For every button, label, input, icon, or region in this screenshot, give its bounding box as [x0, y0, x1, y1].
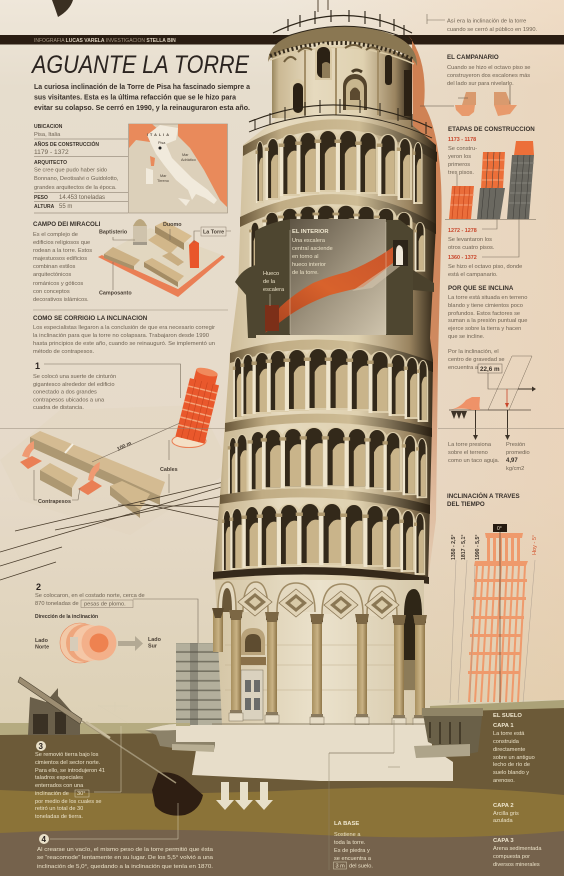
step 4: settling: [37, 803, 214, 870]
panel: el suelo: compuesta por: [493, 854, 530, 860]
credits bar: [0, 35, 564, 44]
panel: etapas de construccion: Se constru-: [448, 146, 477, 152]
step 2: lead weights: Lado: [35, 638, 49, 644]
foundation base: [145, 708, 483, 781]
panel: etapas de construccion: otros cuatro pisos.: [448, 245, 495, 251]
panel: por que se inclina: promedio: [506, 450, 530, 456]
divider: [33, 309, 228, 311]
map of Italy: Mar: [160, 174, 167, 178]
panel: inclinacion a traves del tiempo: [447, 492, 538, 703]
step 3: drill: cimientos del sector norte.: [35, 760, 101, 766]
step 4: settling: Al crearse un vacío, el mismo peso de la torre permitió que ésta: [37, 847, 214, 853]
illustration: campo dei miracoli: Camposanto: [99, 290, 132, 296]
step 2: lead weights: Lado: [148, 637, 162, 643]
columns: [212, 608, 427, 726]
panel: etapas de construccion: está el campanario.: [448, 272, 498, 278]
interior label: central asciende: [292, 246, 333, 252]
panel: el suelo: arenoso.: [493, 778, 515, 784]
tower shadow: [408, 35, 442, 580]
arcade tier 6: [249, 205, 425, 272]
diagram: pressure and gravity: [449, 356, 536, 440]
panel: inclinacion a traves del tiempo: INCLINACIÓN A TRAVES: [447, 492, 520, 500]
step 1: belt and counterweights: 1: [35, 361, 40, 371]
belfry: [268, 10, 417, 120]
panel: etapas de construccion: [445, 126, 536, 278]
fact sheet: Se cree que pudo haber sido: [34, 168, 107, 174]
panel: el suelo: Arena sedimentada: [493, 846, 542, 852]
step 4: settling: se “reacomode” lentamente en su lugar. De los 5,5° volvió a una: [37, 855, 214, 861]
fact sheet: [34, 124, 128, 213]
panel: por que se inclina: La torre está situada en terreno: [448, 295, 527, 301]
fact sheet: Pisa, Italia: [34, 132, 61, 138]
panel: como se corrigio heading and text: Los especialistas llegaron a la conclusión de que era necesario corregir: [33, 325, 215, 331]
panel: campo dei miracoli text: Es el complejo de: [33, 232, 78, 238]
callout: inclination at closing: cuando se cerró al público en 1990.: [447, 27, 538, 33]
fact sheet: ARQUITECTO: [34, 160, 67, 166]
step 1: belt and counterweights: Contrapesos: [38, 499, 71, 505]
step 1: belt and counterweights: [0, 361, 232, 535]
intro text: sus visitantes. Esta es la última refacción que se le hizo para: [34, 92, 237, 102]
panel: etapas de construccion: 1173 - 1178: [448, 137, 476, 143]
step 1: belt and counterweights: conectado a dos grandes: [33, 390, 97, 396]
map of Italy: ITALIA: [147, 133, 171, 137]
paper fold: [0, 428, 564, 430]
step 4: settling: inclinación de 5,0°, quedando a la inclinación que tenía en 1870.: [37, 864, 213, 870]
panel: el suelo: Arcilla gris: [493, 811, 519, 817]
panel: el suelo: [493, 713, 542, 868]
panel: por que se inclina: suman a la presión puntual que: [448, 318, 527, 324]
panel: por que se inclina: Presión: [506, 442, 525, 448]
illustration: campo dei miracoli: Duomo: [163, 222, 182, 228]
panel: como se corrigio heading and text: la inclinación para que la torre no colapsara. Trabajaron desde 1990: [33, 333, 209, 339]
ground layers: [0, 700, 564, 876]
ledge 7: [243, 119, 437, 162]
fact sheet: UBICACION: [34, 124, 63, 130]
step 3: drill: enterrados con una: [35, 783, 84, 789]
panel: etapas de construccion: primeros: [448, 162, 470, 168]
door: [239, 628, 266, 720]
label: la base: Es de piedra y: [334, 848, 370, 854]
label: la base: 3 m: [336, 864, 345, 870]
step 2: lead weights: [35, 582, 198, 663]
panel: el suelo: suelo blando y: [493, 770, 529, 776]
panel: campo dei miracoli text: arquitectónicos: [33, 272, 71, 278]
map of Italy: Pisa: [158, 141, 166, 145]
ground floor: [212, 580, 427, 726]
panel: el suelo: CAPA 3: [493, 838, 514, 844]
panel: el suelo: lecho de río de: [493, 762, 530, 768]
panel: el suelo: diversos minerales: [493, 862, 540, 868]
step 1: belt and counterweights: cuadra de distancia.: [33, 405, 84, 411]
callout: inclination at closing: Así era la inclinación de la torre: [447, 18, 526, 24]
intro text: [34, 82, 251, 112]
panel: por que se inclina: kg/cm2: [506, 466, 524, 472]
panel: etapas de construccion: Se hizo el octavo piso, donde: [448, 264, 522, 270]
fact sheet: ALTURA: [34, 204, 55, 210]
title: AGUANTE LA TORRE: [30, 51, 249, 79]
tower body: [213, 50, 436, 580]
fact sheet: 14.453 toneladas: [59, 195, 105, 201]
panel: etapas de construccion: 1360 - 1372: [448, 255, 477, 261]
step 2: lead weights: 2: [36, 582, 41, 592]
leaning tower: [212, 10, 437, 726]
cables: [0, 481, 228, 580]
fact sheet: AÑOS DE CONSTRUCCIÓN: [34, 140, 99, 148]
railing level 7: [249, 99, 432, 138]
step 3: drill: toneladas de tierra.: [35, 814, 83, 820]
label: la base: LA BASE: [334, 821, 359, 827]
step 2: lead weights: Sur: [148, 644, 158, 650]
panel: por que se inclina: encuentra a: [448, 365, 479, 371]
panel: el suelo: sobre un antiguo: [493, 755, 535, 761]
interior label: en torno al: [292, 254, 318, 260]
panel: por que se inclina: blando y tiene cimientos poco: [448, 303, 523, 309]
panel: inclinacion a traves del tiempo: 0°: [497, 526, 502, 532]
step 2: lead weights: Norte: [35, 644, 49, 650]
blind arches: [218, 582, 397, 616]
step 1: belt and counterweights: gigantesco alrededor del edificio: [33, 382, 115, 388]
ledge 6: [240, 194, 436, 234]
step 3: drill: Se removió tierra bajo los: [35, 752, 99, 758]
panel: inclinacion a traves del tiempo: DEL TIEMPO: [447, 501, 485, 508]
panel: campo dei miracoli text: con conceptos: [33, 289, 70, 295]
arcade tier 5: [233, 348, 428, 422]
panel: inclinacion a traves del tiempo: Hoy - 5°: [532, 535, 538, 555]
stair well label: Hueco: [263, 271, 279, 277]
step 3: drill: 30°: [77, 791, 85, 797]
step 2: lead weights: Dirección de la inclinación: [35, 614, 98, 620]
panel: por que se inclina: [448, 285, 536, 472]
panel: inclinacion a traves del tiempo: 1350 - 2,5°: [451, 535, 457, 560]
panel: etapas de construccion: 1272 - 1278: [448, 228, 477, 234]
fact sheet: PESO: [34, 195, 48, 201]
ledge 3: [220, 488, 430, 514]
panel: inclinacion a traves del tiempo: 1817 - 5,1°: [461, 535, 467, 560]
interior label: [292, 229, 333, 276]
step 2: lead weights: 870 toneladas de: [35, 601, 79, 607]
panel: campo dei miracoli text: románicos y góticos: [33, 281, 83, 287]
ledge 2: [213, 567, 429, 584]
step 1: belt and counterweights: contrapesos ubicados a una: [33, 398, 105, 404]
icon: inclination circles: [60, 623, 116, 663]
step 3: drill: 3: [38, 742, 44, 751]
panel: como se corrigio heading and text: hasta principios de este año, cuando se reinauguró. Se implementó un: [33, 341, 215, 347]
interior label: EL INTERIOR: [292, 229, 329, 235]
panel: el suelo: construida: [493, 739, 520, 745]
step 3: drill: por medio de los cuales se: [35, 799, 102, 805]
panel: campo dei miracoli text: combinan estilos: [33, 264, 76, 270]
illustration: campo dei miracoli: Baptisterio: [99, 230, 128, 236]
step 1: belt and counterweights: 100 m: [116, 441, 133, 453]
step 2: lead weights: pesas de plomo.: [84, 602, 126, 608]
map of Italy: Tirreno: [157, 179, 169, 183]
arrow: to south side: [118, 636, 143, 651]
right pit wall: [422, 708, 483, 756]
panel: interior cutaway: [235, 219, 434, 338]
panel: por que se inclina: Por la inclinación, el: [448, 349, 499, 355]
step 1: belt and counterweights: Se colocó una suerte de cinturón: [33, 374, 116, 380]
label: la base: del suelo.: [349, 864, 373, 870]
label: la base: toda la torre.: [334, 840, 366, 846]
bar 3: [507, 141, 534, 219]
interior label: Una escalera: [292, 238, 326, 244]
panel: el suelo: CAPA 2: [493, 803, 514, 809]
panel: por que se inclina: profundos. Estos factores se: [448, 311, 520, 317]
panel: por que se inclina: centro de gravedad se: [448, 357, 505, 363]
panel: el suelo: La torre está: [493, 731, 525, 737]
stair well label: de la: [263, 279, 276, 285]
fact sheet: 55 m: [59, 204, 72, 210]
arcade tier 7: [256, 130, 423, 204]
panel: el campanario: [420, 54, 530, 116]
panel: por que se inclina: como un taco aguja.: [448, 458, 500, 464]
illustration: campo dei miracoli: [98, 219, 231, 297]
left pit wall: [145, 724, 215, 751]
panel: el suelo: azulada: [493, 818, 513, 824]
panel: por que se inclina: POR QUE SE INCLINA: [448, 285, 514, 292]
panel: como se corrigio heading and text: [33, 315, 215, 355]
step 3: drill: taladros especiales: [35, 775, 83, 781]
ledge 4: [225, 414, 432, 437]
panel: por que se inclina: La torre presiona: [448, 442, 492, 448]
belfry small arch row: [284, 45, 380, 62]
small tower elevation: [468, 533, 528, 674]
measurement and cables labels: [34, 440, 169, 500]
panel: el campanario: construyeron dos escalones más: [447, 73, 530, 79]
panel: etapas de construccion: yeron los: [448, 154, 471, 160]
interior label: hueco interior: [292, 262, 326, 268]
step 4: settling: 4: [42, 835, 46, 844]
panel: por que se inclina: 4,97: [506, 458, 518, 464]
panel: campo dei miracoli text: majestuosos edificios: [33, 256, 87, 262]
credits bar: INFOGRAFIA LUCAS VARELA INVESTIGACION STELLA BIN: [34, 38, 176, 44]
panel: por que se inclina: sobre el terreno: [448, 450, 488, 456]
arcade tier 3: [222, 503, 425, 575]
buildings: [20, 431, 165, 518]
panel: como se corrigio heading and text: COMO SE CORRIGIO LA INCLINACION: [33, 315, 148, 322]
callout: inclination at closing: [427, 14, 538, 33]
panel: el campanario: del lado sur para nivelarlo.: [447, 81, 514, 87]
panel: el suelo: directamente: [493, 747, 525, 753]
panel: campo dei miracoli text: CAMPO DEI MIRACOLI: [33, 221, 101, 228]
bar 2: [477, 152, 505, 219]
mini orange tower: [172, 365, 222, 448]
panel: etapas de construccion: ETAPAS DE CONSTRUCCION: [448, 126, 535, 133]
panel: como se corrigio heading and text: método de contrapesos.: [33, 349, 94, 355]
step 3: drill: [18, 677, 176, 820]
panel: etapas de construccion: Se levantaron los: [448, 237, 492, 243]
void under north side: [152, 772, 203, 816]
intro text: La curiosa inclinación de la Torre de Pisa ha fascinado siempre a: [34, 82, 251, 91]
step 3: drill: inclinación de: [35, 791, 69, 797]
top decorative tip: [52, 0, 73, 17]
fact sheet: Bonnano, Deotisalvi o Guidolotto,: [34, 176, 119, 182]
panel: etapas de construccion: tres pisos.: [448, 170, 474, 176]
panel: el suelo: EL SUELO: [493, 713, 522, 719]
label: la base: se encuentra a: [334, 856, 372, 862]
step 1: belt and counterweights: Cables: [160, 467, 178, 473]
intro text: evitar su colapso. Se cerró en 1990, y la reinauguraron esta año.: [34, 103, 250, 112]
illustration: campo dei miracoli: La Torre: [203, 230, 224, 236]
panel: el suelo: CAPA 1: [493, 723, 514, 729]
panel: inclinacion a traves del tiempo: 1990 - 5,5°: [475, 535, 481, 560]
panel: campo dei miracoli text: edificios religiosos que: [33, 240, 90, 246]
bar 1: [449, 186, 474, 219]
arrows down: [216, 782, 273, 810]
label: la base: Sostiene a: [334, 832, 361, 838]
panel: por que se inclina: que se incline.: [448, 334, 485, 340]
map of Italy: [128, 124, 228, 213]
panel: por que se inclina: ejerce sobre la tierra y hacen: [448, 326, 521, 332]
stair well label: [263, 271, 285, 293]
top pole: [318, 0, 328, 12]
step 2: lead weights: Se colocaron, en el costado norte, cerca de: [35, 593, 145, 599]
arcade tier 4: [228, 427, 427, 498]
stair well label: escalera: [263, 287, 285, 293]
panel: el campanario: Cuando se hizo el octavo piso se: [447, 65, 530, 71]
drilling rig: [18, 677, 176, 783]
lead weights stack: [176, 643, 230, 725]
interior label: de la torre.: [292, 270, 319, 276]
panel: campo dei miracoli text: decorativos islámicos.: [33, 297, 89, 303]
ledge 5: [230, 339, 433, 372]
map of Italy: Adriático: [181, 158, 196, 162]
panel: campo dei miracoli text: [33, 221, 101, 303]
label: la base: [329, 720, 400, 870]
panel: por que se inclina: 22,6 m: [480, 366, 500, 373]
step 3: drill: retiró un total de 30: [35, 806, 83, 812]
panel: el campanario: EL CAMPANARIO: [447, 54, 499, 61]
fact sheet: grandes arquitectos de la época.: [34, 185, 117, 191]
fact sheet: 1179 - 1372: [34, 149, 69, 156]
step 3: drill: Para ello, se introdujeron 41: [35, 768, 105, 774]
map of Italy: Mar: [182, 153, 189, 157]
panel: campo dei miracoli text: rodean a la torre. Estos: [33, 248, 92, 254]
